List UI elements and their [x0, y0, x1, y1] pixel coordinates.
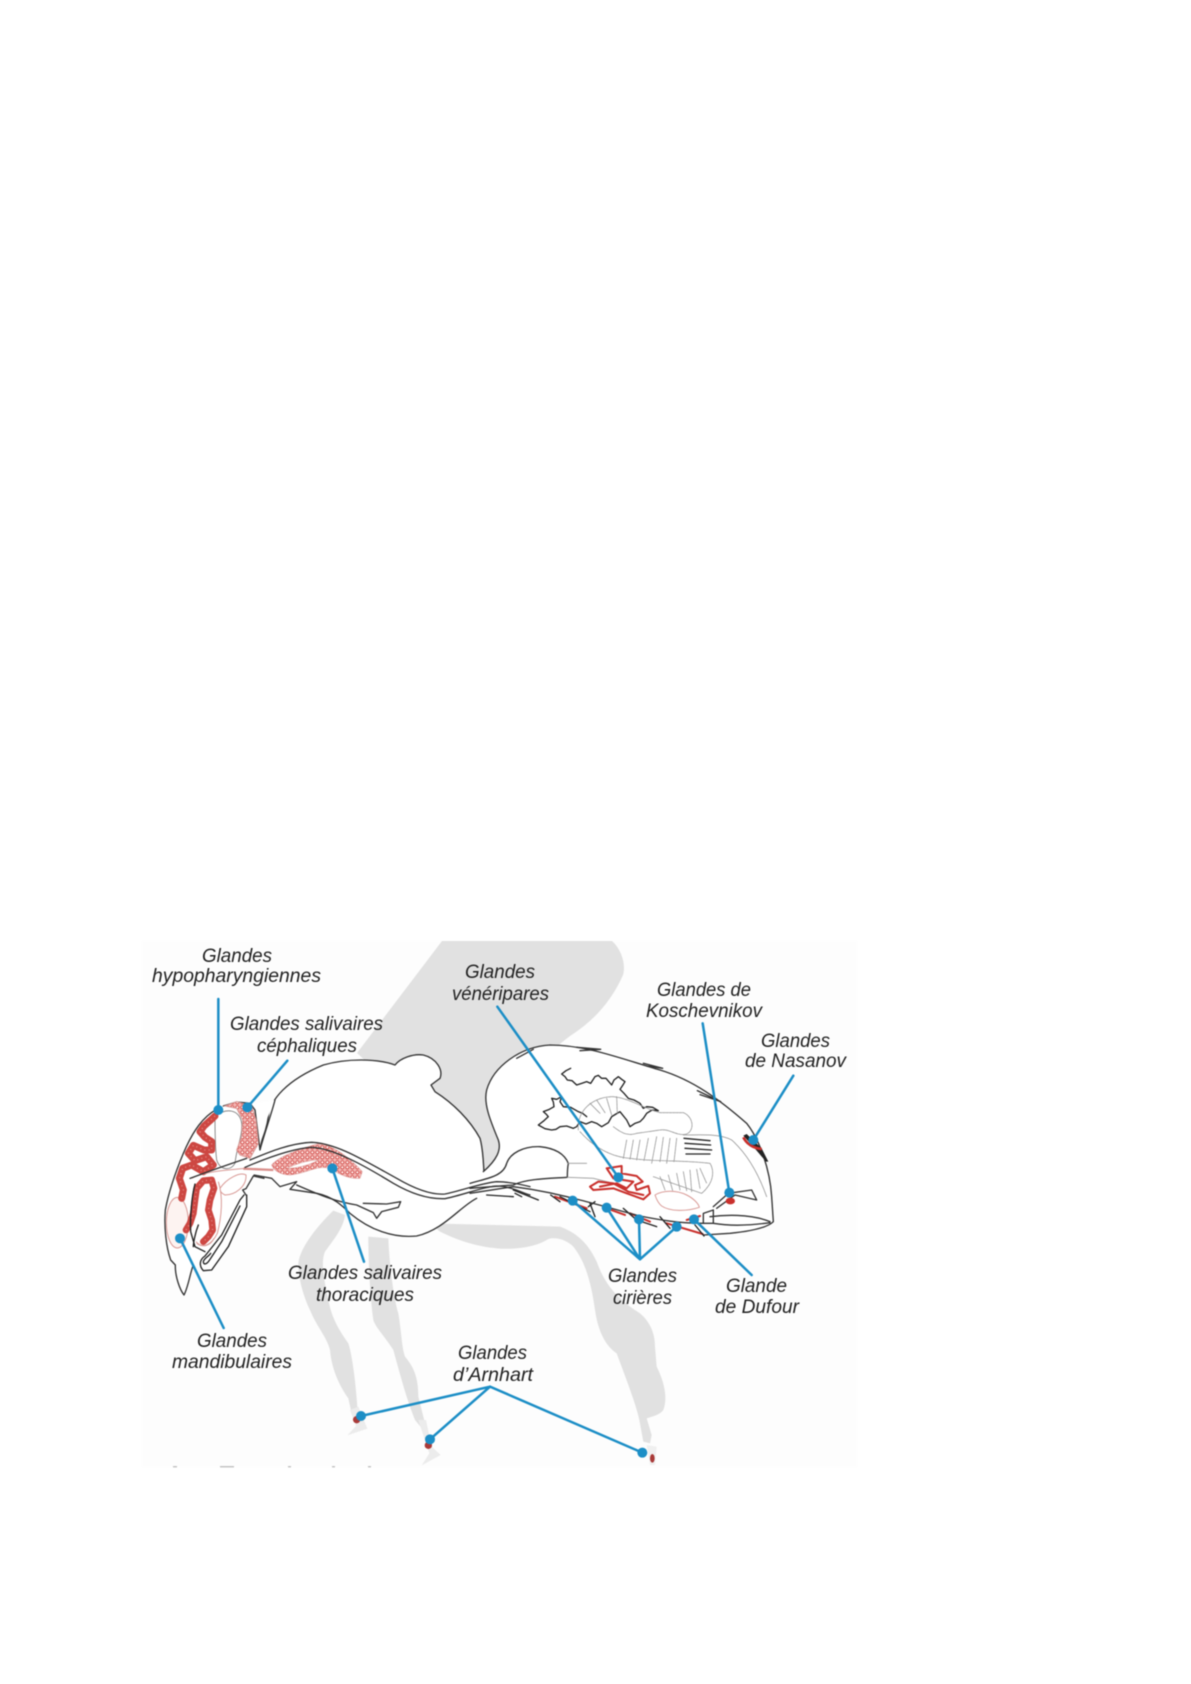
black inner structures: [191, 1184, 205, 1252]
label: Glandes de Koschevnikov: Glandes de: [657, 979, 751, 1001]
blue dots and Arnhart red spots: [175, 1102, 758, 1463]
head dots: [175, 1102, 337, 1243]
label: Glandes de Koschevnikov: Koschevnikov: [646, 1000, 763, 1022]
hypopharyngeal glands red: [179, 1116, 215, 1198]
hypopharyngeal lobe white: [215, 1111, 242, 1169]
label: Glandes salivaires céphaliques: céphaliques: [257, 1035, 357, 1057]
anatomy: abdomen: [470, 1045, 773, 1236]
label: Glande de Dufour: Glande: [726, 1275, 787, 1297]
label: Glandes de Koschevnikov: [646, 979, 763, 1022]
abdomen dots: [568, 1135, 758, 1232]
label: Glandes de Nasanov: [745, 1030, 847, 1072]
label: Glandes d'Arnhart: d’Arnhart: [453, 1364, 535, 1386]
label: Glandes hypopharyngiennes: hypopharyngiennes: [152, 965, 321, 987]
label: Glandes mandibulaires: mandibulaires: [172, 1351, 292, 1373]
silhouette: grey hind leg: [430, 1223, 665, 1465]
mandibular gland: [166, 1197, 188, 1248]
label: Glandes hypopharyngiennes: Glandes: [202, 945, 272, 967]
anatomy: thorax: [250, 1055, 530, 1236]
dark bands: [684, 1138, 712, 1154]
wax plates: [555, 1197, 703, 1234]
label: Glandes vénéripares: [452, 961, 549, 1005]
pink sac: [655, 1191, 699, 1210]
thoracic salivary gland: [272, 1143, 362, 1178]
leader lines: [180, 999, 793, 1453]
second gland branch red: [186, 1180, 214, 1242]
salivary duct: [243, 1169, 273, 1170]
label: Glandes d'Arnhart: [453, 1342, 535, 1386]
proboscis: [200, 1195, 247, 1271]
silhouette: grey front and middle legs: [298, 1211, 441, 1465]
abdomen outline: [483, 1045, 773, 1235]
coxa lines: [297, 1185, 401, 1218]
oesophagus lower: [245, 1147, 530, 1199]
label: Glandes vénéripares: vénéripares: [452, 983, 549, 1005]
label: Glandes de Nasanov: de Nasanov: [745, 1050, 847, 1072]
venom gland squiggles: [538, 1068, 658, 1130]
cropped caption fragments at bottom edge: [173, 1466, 371, 1468]
head outline: [165, 1100, 275, 1295]
leader: head and thorax: [180, 999, 364, 1328]
Nasanov gland: [743, 1134, 768, 1162]
label: Glandes d'Arnhart: Glandes: [458, 1342, 527, 1364]
label: Glandes vénéripares: Glandes: [465, 961, 535, 983]
cephalic salivary gland: [225, 1102, 258, 1158]
label: Glandes salivaires céphaliques: [230, 1013, 383, 1057]
label: Glande de Dufour: [715, 1275, 800, 1318]
honey crop: [470, 1147, 568, 1188]
leader: Arnhart: [361, 1387, 642, 1453]
thorax ventral outline: [254, 1175, 477, 1236]
tergite marks: [517, 1047, 721, 1102]
label: Glandes salivaires thoraciques: thoraciques: [316, 1284, 414, 1306]
rectum and intestine arcs: [578, 1097, 713, 1193]
sting and lancets: [703, 1190, 770, 1225]
Koschevnikov gland red: [726, 1198, 735, 1204]
silhouette: grey back wing: [357, 941, 624, 1173]
label: Glandes hypopharyngiennes: [152, 945, 321, 987]
gland duct outlines: [192, 1168, 247, 1246]
label: Glandes de Nasanov: Glandes: [761, 1030, 830, 1052]
oesophagus upper: [250, 1142, 530, 1194]
label: Glandes cirières: Glandes: [608, 1265, 677, 1287]
labrum mouth: [196, 1238, 214, 1246]
label: Glandes cirières: [608, 1265, 677, 1309]
label: Glandes mandibulaires: Glandes: [197, 1330, 267, 1352]
label: Glandes salivaires thoraciques: [288, 1262, 442, 1306]
ventral lines: [470, 1187, 703, 1223]
venom gland red: [590, 1166, 650, 1199]
Arnhart gland spots: [353, 1411, 655, 1463]
gland texture: [179, 1116, 215, 1242]
thorax dorsal outline: [258, 1055, 500, 1173]
label: Glandes salivaires céphaliques: Glandes salivaires: [230, 1013, 383, 1035]
leader: abdomen glands: [497, 1007, 793, 1275]
panel: diagram background: [142, 941, 857, 1467]
label: Glandes mandibulaires: [172, 1330, 292, 1373]
label: Glande de Dufour: de Dufour: [715, 1296, 800, 1318]
oesophagus tube and thoracic salivary gland: [243, 1142, 530, 1199]
label: Glandes salivaires thoraciques: Glandes salivaires: [288, 1262, 442, 1284]
label: Glandes cirières: cirières: [613, 1287, 672, 1309]
anatomy: head and salivary system: [165, 1100, 275, 1295]
neck lines: [243, 1176, 264, 1195]
